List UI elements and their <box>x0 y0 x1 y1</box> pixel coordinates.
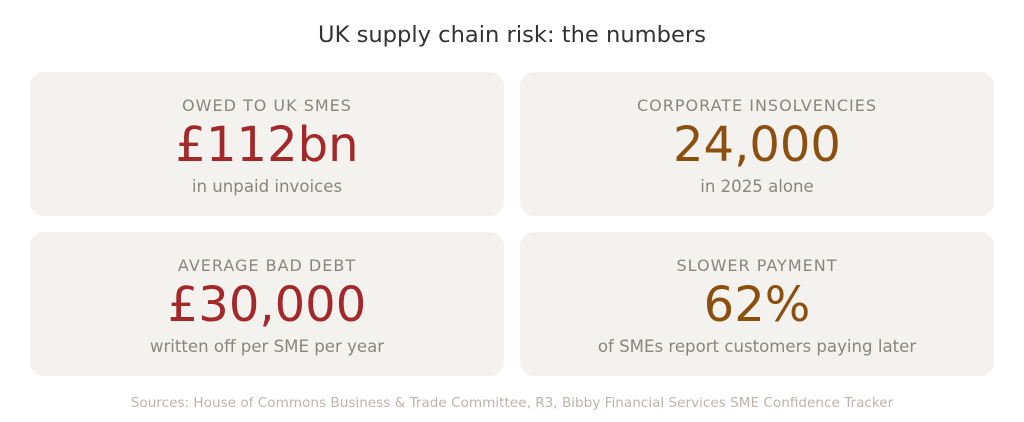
panel: owed to UK SMEs: in unpaid invoices <box>192 177 342 196</box>
panel: slower payment: 62% <box>704 277 810 333</box>
panel: owed to UK SMEs: OWED TO UK SMES <box>182 96 352 115</box>
title: UK supply chain risk: the numbers <box>318 22 706 48</box>
panel: slower payment <box>520 232 994 376</box>
panel: average bad debt <box>30 232 504 376</box>
sources: Sources: House of Commons Business & Trade Committee, R3, Bibby Financial Services SME Confidence Tracker <box>131 395 893 411</box>
panel: corporate insolvencies: in 2025 alone <box>700 177 814 196</box>
panel: slower payment: SLOWER PAYMENT <box>676 256 837 275</box>
panel: owed to UK SMEs <box>30 72 504 216</box>
panel: slower payment: of SMEs report customers paying later <box>598 337 916 356</box>
panel: average bad debt: written off per SME per year <box>150 337 384 356</box>
panel: owed to UK SMEs: £112bn <box>175 117 359 173</box>
panel: average bad debt: £30,000 <box>168 277 366 333</box>
panel: corporate insolvencies: 24,000 <box>673 117 841 173</box>
panel: corporate insolvencies <box>520 72 994 216</box>
panel: average bad debt: AVERAGE BAD DEBT <box>178 256 356 275</box>
panel: corporate insolvencies: CORPORATE INSOLVENCIES <box>637 96 877 115</box>
